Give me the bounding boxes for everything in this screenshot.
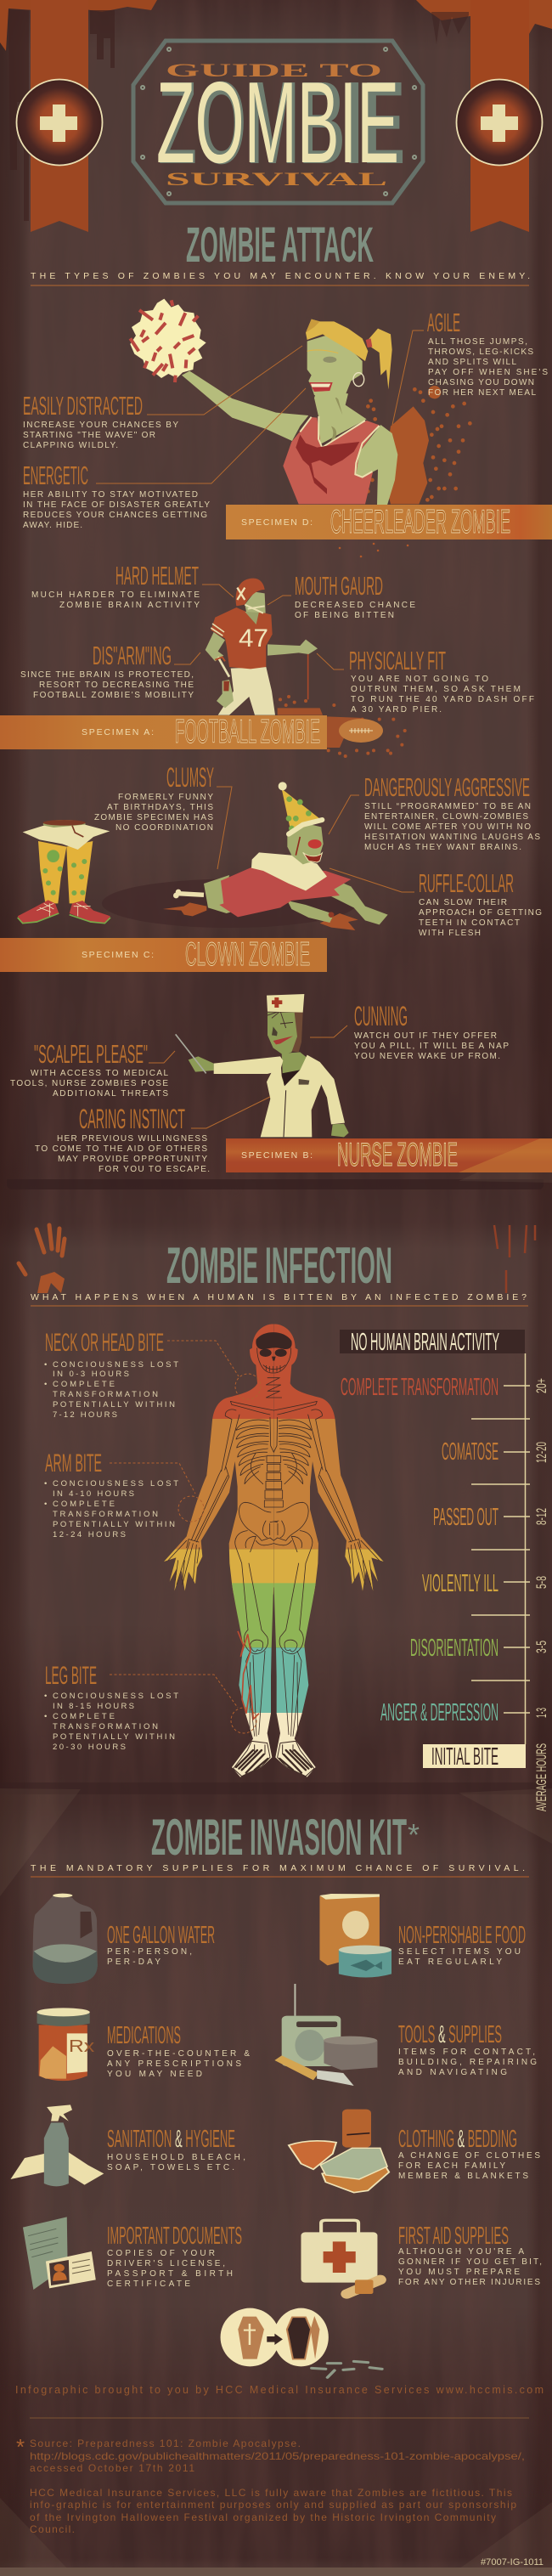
heading: zombie invasion kit bbox=[151, 1809, 420, 1866]
callout: arm bite: IN 4-10 HOURS bbox=[53, 1489, 134, 1499]
callout: physically fit: PHYSICALLY FIT bbox=[349, 646, 446, 675]
heading: zombie invasion kit: * bbox=[408, 1817, 420, 1852]
hour labels: 3-5 bbox=[533, 1641, 549, 1653]
callout: caring instinct: CARING INSTINCT bbox=[79, 1104, 185, 1134]
illustration: clown zombie bbox=[18, 786, 388, 930]
hour labels: 20+ bbox=[533, 1378, 549, 1393]
callout: important documents bbox=[107, 2223, 242, 2289]
panel: zombie infection bbox=[19, 1225, 549, 1811]
callout: physically fit: YOU ARE NOT GOING TO bbox=[351, 675, 488, 684]
callout: arm bite: • bbox=[44, 1500, 47, 1509]
callout: hard helmet bbox=[31, 561, 234, 610]
callout: caring instinct bbox=[35, 1097, 270, 1174]
icon: radio, tape and knife bbox=[274, 1984, 377, 2086]
callout: agile: CHASING YOU DOWN bbox=[428, 378, 534, 387]
callout: dangerously aggressive: HESITATION WANTING LAUGHS AS bbox=[364, 833, 540, 842]
callout: cunning: WATCH OUT IF THEY OFFER bbox=[354, 1031, 497, 1041]
callout: one gallon water: PER-PERSON, bbox=[107, 1947, 192, 1957]
banner: specimen d bbox=[226, 504, 552, 540]
callout: leg bite: 20-30 HOURS bbox=[53, 1743, 126, 1752]
callout: non-perishable food bbox=[398, 1922, 526, 1967]
hour labels: 1-3 bbox=[533, 1708, 549, 1718]
callout: scalpel please bbox=[10, 1039, 175, 1099]
hour labels: 5-8 bbox=[533, 1576, 549, 1589]
callout: ruffle-collar: CAN SLOW THEIR bbox=[419, 898, 507, 907]
callout: hard helmet: MUCH HARDER TO ELIMINATE bbox=[31, 590, 200, 600]
chart: infection timeline bbox=[340, 1329, 549, 1811]
callout: scalpel please: TOOLS, NURSE ZOMBIES POSE bbox=[10, 1079, 168, 1088]
callout: neck or head bite: • bbox=[44, 1360, 47, 1370]
callout: scalpel please: "SCALPEL PLEASE" bbox=[34, 1039, 148, 1069]
callout: hard helmet: ZOMBIE BRAIN ACTIVITY bbox=[59, 601, 200, 610]
illustration: cheerleader zombie bbox=[130, 299, 470, 505]
disclaimer: HCC Medical Insurance Services, LLC is fully aware that Zombies are fictitious. This bbox=[30, 2487, 512, 2499]
callout: ruffle-collar: WITH FLESH bbox=[419, 929, 481, 938]
disclaimer: Council. bbox=[30, 2523, 75, 2535]
callout: first aid supplies: YOU MUST PREPARE bbox=[398, 2268, 520, 2277]
callout: agile: THROWS, LEG-KICKS bbox=[428, 347, 533, 357]
callout: agile: FOR HER NEXT MEAL bbox=[428, 388, 536, 398]
hour labels: 8-12 bbox=[533, 1508, 549, 1525]
callout: dangerously aggressive: STILL “PROGRAMMED” TO BE AN bbox=[364, 802, 531, 811]
callout: energetic: ENERGETIC bbox=[23, 460, 88, 490]
callout: arm bite bbox=[44, 1449, 204, 1539]
right ribbon bbox=[470, 0, 529, 232]
callout: physically fit: A 30 YARD PIER. bbox=[351, 705, 442, 715]
callout: first aid supplies: ALTHOUGH YOU'RE A bbox=[398, 2247, 524, 2257]
callout: hard helmet: HARD HELMET bbox=[115, 561, 199, 590]
callout: disarming: DIS"ARM"ING bbox=[93, 641, 172, 670]
callout: physically fit: TO RUN THE 40 YARD DASH OFF bbox=[351, 695, 534, 704]
title: guide to: GUIDE TO bbox=[166, 59, 382, 81]
callout: arm bite: 12-24 HOURS bbox=[53, 1530, 126, 1539]
callout: clumsy: ZOMBIE SPECIMEN HAS bbox=[94, 813, 213, 822]
callout: physically fit: OUTRUN THEM, SO ASK THEM bbox=[351, 685, 521, 694]
callout: easily distracted: EASILY DISTRACTED bbox=[23, 391, 143, 421]
illustration: football zombie: 47 bbox=[239, 624, 268, 652]
callout: cunning: YOU NEVER WAKE UP FROM. bbox=[354, 1052, 500, 1061]
callout: neck or head bite: • bbox=[44, 1380, 47, 1389]
callout: leg bite: LEG BITE bbox=[45, 1662, 97, 1690]
callout: mouth gaurd: MOUTH GAURD bbox=[295, 571, 383, 601]
banner: specimen a bbox=[0, 714, 327, 750]
callout: caring instinct: HER PREVIOUS WILLINGNESS bbox=[57, 1134, 207, 1144]
callout: neck or head bite: TRANSFORMATION bbox=[53, 1390, 158, 1399]
callout: disarming: SINCE THE BRAIN IS PROTECTED, bbox=[20, 670, 194, 680]
callout: clumsy: AT BIRTHDAYS, THIS bbox=[107, 803, 213, 812]
callout: neck or head bite: POTENTIALLY WITHIN bbox=[53, 1400, 175, 1409]
banner: specimen c bbox=[0, 936, 327, 973]
callout: medications: MEDICATIONS bbox=[107, 2022, 181, 2049]
callout: arm bite: COMPLETE bbox=[53, 1500, 115, 1509]
callout: mouth gaurd: DECREASED CHANCE bbox=[295, 601, 415, 610]
reference code: #7007-IG-1011 bbox=[481, 2557, 544, 2568]
callout: agile: PAY OFF WHEN SHE'S bbox=[428, 368, 548, 377]
panel: header bbox=[17, 0, 542, 232]
icon: medicine bottle: Rx bbox=[69, 2037, 95, 2055]
illustration: football zombie bbox=[206, 579, 405, 756]
callout: ruffle-collar: APPROACH OF GETTING bbox=[419, 908, 542, 918]
callout: arm bite: TRANSFORMATION bbox=[53, 1510, 158, 1519]
callout: arm bite: • bbox=[44, 1479, 47, 1489]
callout: clothing and bedding: MEMBER & BLANKETS bbox=[398, 2172, 528, 2181]
callout: energetic: HER ABILITY TO STAY MOTIVATED bbox=[23, 490, 198, 500]
callout: clumsy bbox=[94, 762, 232, 869]
callout: cunning bbox=[310, 1001, 509, 1061]
callout: leg bite: • bbox=[44, 1692, 47, 1701]
callout: agile: ALL THOSE JUMPS, bbox=[428, 337, 527, 347]
callout: energetic: REDUCES YOUR CHANCES GETTING bbox=[23, 511, 207, 520]
callout: leg bite: IN 8-15 HOURS bbox=[53, 1702, 134, 1711]
subheading: WHAT HAPPENS WHEN A HUMAN IS BITTEN BY AN INFECTED ZOMBIE? bbox=[31, 1292, 527, 1302]
callout: tools and supplies: AND NAVIGATING bbox=[398, 2068, 507, 2077]
callout: important documents: COPIES OF YOUR bbox=[107, 2249, 215, 2258]
callout: sanitation and hygiene: SANITATION & HYGIENE bbox=[107, 2126, 235, 2153]
callout: mouth gaurd bbox=[268, 571, 415, 620]
callout: energetic: IN THE FACE OF DISASTER GREATLY bbox=[23, 500, 210, 510]
callout: caring instinct: TO COME TO THE AID OF OTHERS bbox=[35, 1144, 207, 1154]
sponsor line: Infographic brought to you by HCC Medical Insurance Services www.hccmis.com bbox=[15, 2384, 544, 2396]
callout: leg bite: COMPLETE bbox=[53, 1712, 115, 1721]
subheading: THE MANDATORY SUPPLIES FOR MAXIMUM CHANCE OF SURVIVAL. bbox=[31, 1863, 525, 1873]
right cross badge bbox=[457, 80, 542, 165]
panel: zombie attack bbox=[0, 217, 552, 1174]
icon: football bbox=[339, 719, 383, 743]
callout: scalpel please: ADDITIONAL THREATS bbox=[53, 1089, 168, 1099]
callout: tools and supplies: BUILDING, REPAIRING bbox=[398, 2058, 537, 2067]
kit icons lower bbox=[23, 2217, 382, 2377]
illustration: nurse zombie bbox=[176, 994, 349, 1137]
title plate bbox=[133, 41, 423, 203]
panel: zombie invasion kit bbox=[10, 1809, 544, 2568]
icon: first aid kit bbox=[301, 2220, 380, 2294]
callout: arm bite: CONCIOUSNESS LOST bbox=[53, 1479, 178, 1489]
callout: clothing and bedding: A CHANGE OF CLOTHES bbox=[398, 2151, 540, 2161]
callout: leg bite: TRANSFORMATION bbox=[53, 1722, 158, 1731]
title: survival: SURVIVAL bbox=[166, 168, 387, 189]
callout: tools and supplies bbox=[398, 2021, 537, 2077]
callout: medications: ANY PRESCRIPTIONS bbox=[107, 2059, 241, 2069]
callout: leg bite bbox=[44, 1662, 256, 1752]
callout: dangerously aggressive: ENTERTAINER, CLOWN-ZOMBIES bbox=[364, 812, 528, 822]
banner: specimen a: SPECIMEN A: bbox=[82, 727, 154, 737]
callout: first aid supplies: FOR ANY OTHER INJURIES bbox=[398, 2278, 540, 2287]
icon: bloody hand print bbox=[19, 1225, 65, 1293]
callout: arm bite: POTENTIALLY WITHIN bbox=[53, 1520, 175, 1529]
callout: agile: AGILE bbox=[427, 308, 460, 337]
callout: energetic: AWAY. HIDE. bbox=[23, 521, 82, 530]
callout: neck or head bite: 7-12 HOURS bbox=[53, 1410, 117, 1420]
callout: neck or head bite: NECK OR HEAD BITE bbox=[45, 1329, 164, 1357]
panel: zombie invasion kit: ONE GALLON WATER bbox=[107, 1922, 215, 1949]
callout: important documents: CERTIFICATE bbox=[107, 2279, 190, 2289]
callout: energetic bbox=[23, 388, 306, 530]
hour labels: AVERAGE HOURS bbox=[533, 1743, 549, 1811]
footnote: source bbox=[16, 2434, 525, 2474]
callout: sanitation and hygiene: SOAP, TOWELS ETC. bbox=[107, 2163, 234, 2172]
callout: tools and supplies: ITEMS FOR CONTACT, bbox=[398, 2048, 535, 2057]
callout: ruffle-collar bbox=[330, 868, 542, 938]
callout: disarming: RESORT TO DECREASING THE bbox=[39, 681, 194, 690]
callout: medications bbox=[107, 2022, 250, 2079]
callout: dangerously aggressive: WILL COME AFTER YOU WITH NO bbox=[364, 822, 531, 832]
callout: important documents: DRIVER'S LICENSE, bbox=[107, 2259, 225, 2268]
callout: clumsy: FORMERLY FUNNY bbox=[118, 793, 213, 802]
callout: sanitation and hygiene: HOUSEHOLD BLEACH, bbox=[107, 2153, 245, 2162]
icon: footprints bbox=[312, 2361, 382, 2377]
callout: disarming: FOOTBALL ZOMBIE'S MOBILITY bbox=[33, 691, 194, 700]
icon: food box and tin bbox=[319, 1894, 391, 1977]
callout: agile: AND SPLITS WILL bbox=[428, 358, 516, 367]
callout: first aid supplies: GONNER IF YOU GET BIT, bbox=[398, 2257, 542, 2267]
callout: leg bite: CONCIOUSNESS LOST bbox=[53, 1692, 178, 1701]
callout: clothing and bedding: FOR EACH FAMILY bbox=[398, 2161, 505, 2171]
subheading: THE TYPES OF ZOMBIES YOU MAY ENCOUNTER. KNOW YOUR ENEMY. bbox=[31, 271, 530, 281]
callout: cunning: YOU A PILL, IT WILL BE A NAP bbox=[354, 1042, 509, 1051]
icon: medicine bottle bbox=[37, 2008, 95, 2081]
callout: neck or head bite bbox=[44, 1329, 261, 1420]
icon: documents bbox=[23, 2217, 96, 2290]
hour labels: 12-20 bbox=[533, 1442, 549, 1463]
banner: specimen c: CLOWN ZOMBIE bbox=[185, 936, 310, 973]
callout: neck or head bite: COMPLETE bbox=[53, 1380, 115, 1389]
banner: specimen d: SPECIMEN D: bbox=[241, 517, 313, 528]
icon: blood streaks bbox=[494, 1225, 535, 1293]
callout: one gallon water bbox=[107, 1922, 215, 1967]
title: zombie bbox=[156, 58, 405, 189]
callout: medications: OVER-THE-COUNTER & bbox=[107, 2049, 250, 2059]
chart: body infection skeleton bbox=[157, 1317, 391, 1781]
callout: neck or head bite: CONCIOUSNESS LOST bbox=[53, 1360, 178, 1370]
callout: easily distracted: STARTING "THE WAVE" OR bbox=[23, 431, 155, 440]
callout: one gallon water: PER-DAY bbox=[107, 1957, 161, 1967]
callout: arm bite: ARM BITE bbox=[45, 1449, 102, 1477]
footnote: source: Source: Preparedness 101: Zombie Apocalypse. bbox=[30, 2438, 301, 2449]
footnote: source: accessed October 17th 2011 bbox=[30, 2462, 194, 2474]
callout: caring instinct: MAY PROVIDE OPPORTUNITY bbox=[58, 1155, 207, 1164]
left cross badge bbox=[17, 80, 102, 165]
disclaimer bbox=[30, 2487, 516, 2535]
callout: non-perishable food: SELECT ITEMS YOU bbox=[398, 1947, 521, 1957]
left ribbon bbox=[31, 0, 88, 232]
callout: clothing and bedding bbox=[398, 2126, 540, 2181]
panel: zombie attack: FOOTBALL ZOMBIE bbox=[175, 714, 320, 750]
callout: important documents: PASSPORT & BIRTH bbox=[107, 2269, 233, 2279]
kit icons bbox=[10, 1894, 391, 2193]
callout: first aid supplies bbox=[398, 2223, 542, 2287]
callout: easily distracted bbox=[23, 346, 302, 450]
icon: clothing and bedding bbox=[289, 2110, 389, 2193]
callout: ruffle-collar: TEETH IN CONTACT bbox=[419, 918, 520, 928]
callout: caring instinct: FOR YOU TO ESCAPE. bbox=[99, 1165, 210, 1174]
disclaimer: of the Irvington Halloween Festival organized by the Historic Irvington Community bbox=[30, 2511, 496, 2523]
panel: zombie invasion kit: IMPORTANT DOCUMENTS bbox=[107, 2223, 242, 2250]
disclaimer: info-graphic is for entertainment purposes only and supplied as part our sponsorship bbox=[30, 2499, 516, 2511]
callout: sanitation and hygiene bbox=[107, 2126, 245, 2172]
banner: specimen b: SPECIMEN B: bbox=[241, 1150, 313, 1161]
icon: spray bottle and towel bbox=[10, 2104, 104, 2186]
callout: non-perishable food: EAT REGULARLY bbox=[398, 1957, 502, 1967]
callout: leg bite: POTENTIALLY WITHIN bbox=[53, 1732, 175, 1742]
callout: agile bbox=[392, 308, 548, 425]
callout: dangerously aggressive: MUCH AS THEY WANT BRAINS. bbox=[364, 843, 521, 852]
callout: cunning: CUNNING bbox=[354, 1001, 408, 1031]
callout: clumsy: NO COORDINATION bbox=[115, 823, 213, 833]
icon: water jug bbox=[33, 1894, 98, 1984]
callout: easily distracted: INCREASE YOUR CHANCES BY bbox=[23, 421, 178, 430]
hour labels bbox=[533, 1378, 549, 1811]
callout: scalpel please: WITH ACCESS TO MEDICAL bbox=[31, 1069, 168, 1078]
callout: disarming bbox=[20, 641, 200, 700]
banner: specimen c: SPECIMEN C: bbox=[82, 950, 154, 960]
icon: opening coffins bbox=[221, 2308, 329, 2366]
callout: physically fit bbox=[317, 646, 534, 715]
footnote: source: http://blogs.cdc.gov/publichealthmatters/2011/05/preparedness-101-zombie-apocalypse/, bbox=[30, 2450, 525, 2462]
callout: neck or head bite: IN 0-3 HOURS bbox=[53, 1370, 129, 1379]
callout: mouth gaurd: OF BEING BITTEN bbox=[295, 611, 394, 620]
stage labels bbox=[341, 1374, 498, 1726]
footnote: source: * bbox=[16, 2434, 25, 2460]
callout: dangerously aggressive bbox=[329, 772, 540, 852]
callout: medications: YOU MAY NEED bbox=[107, 2070, 202, 2079]
callout: clumsy: CLUMSY bbox=[166, 762, 214, 793]
callout: leg bite: • bbox=[44, 1712, 47, 1721]
banner: specimen b bbox=[226, 1137, 552, 1173]
callout: easily distracted: CLAPPING WILDLY. bbox=[23, 441, 118, 450]
